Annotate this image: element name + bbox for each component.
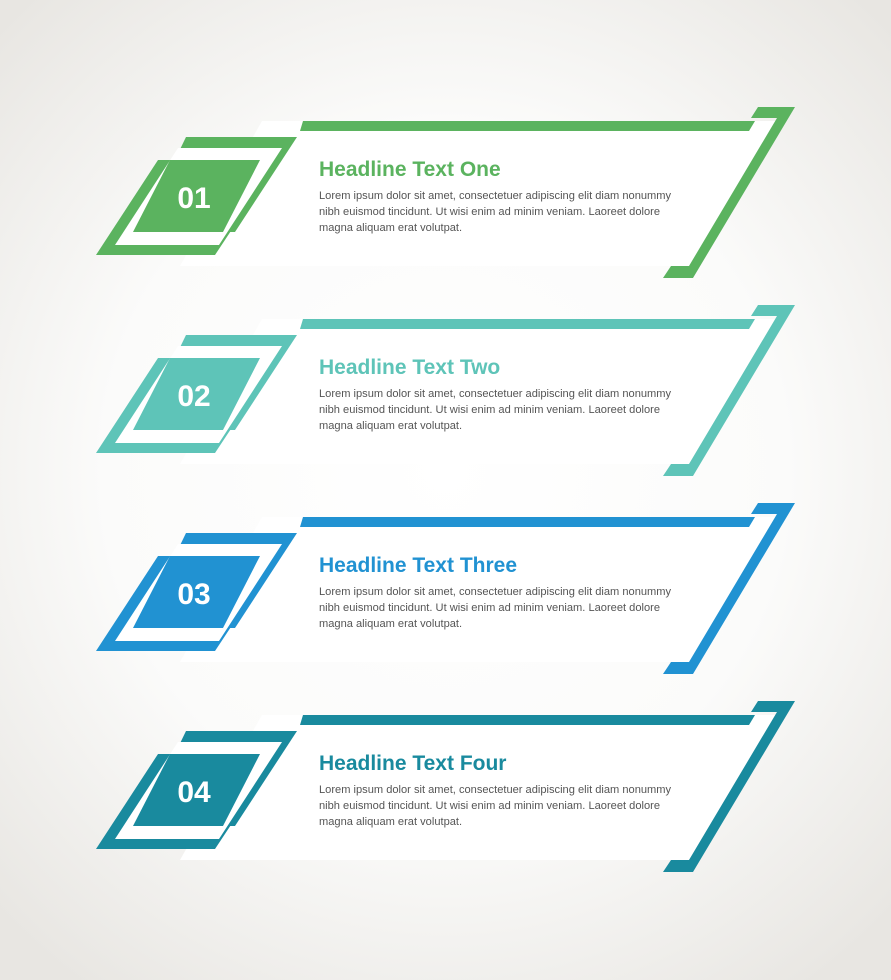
top bar xyxy=(300,715,755,725)
body text: magna aliquam erat volutpat. xyxy=(319,618,462,630)
right bracket xyxy=(663,305,795,476)
card background xyxy=(180,319,777,464)
panel: step 01 xyxy=(96,107,795,278)
top bar xyxy=(300,517,755,527)
body text: nibh euismod tincidunt. Ut wisi enim ad minim veniam. Laoreet dolore xyxy=(319,800,660,812)
body text: magna aliquam erat volutpat. xyxy=(319,816,462,828)
panel: step 02 xyxy=(96,305,795,476)
panel: step 03 xyxy=(96,503,795,674)
body text: Lorem ipsum dolor sit amet, consectetuer adipiscing elit diam nonummy xyxy=(319,784,672,796)
right bracket xyxy=(663,503,795,674)
right bracket xyxy=(663,701,795,872)
top bar xyxy=(300,319,755,329)
heading: Headline Text Four xyxy=(319,752,506,775)
body text: nibh euismod tincidunt. Ut wisi enim ad minim veniam. Laoreet dolore xyxy=(319,602,660,614)
body text: nibh euismod tincidunt. Ut wisi enim ad minim veniam. Laoreet dolore xyxy=(319,404,660,416)
body text: Lorem ipsum dolor sit amet, consectetuer adipiscing elit diam nonummy xyxy=(319,190,672,202)
body text: Lorem ipsum dolor sit amet, consectetuer adipiscing elit diam nonummy xyxy=(319,388,672,400)
panel: step 04 xyxy=(96,701,795,872)
heading: Headline Text One xyxy=(319,158,501,181)
number badge xyxy=(96,731,297,849)
card background xyxy=(180,121,777,266)
body text: nibh euismod tincidunt. Ut wisi enim ad minim veniam. Laoreet dolore xyxy=(319,206,660,218)
number badge xyxy=(96,137,297,255)
number badge: 03 xyxy=(177,578,211,611)
number badge xyxy=(96,335,297,453)
number badge: 01 xyxy=(177,182,211,215)
body text: Lorem ipsum dolor sit amet, consectetuer adipiscing elit diam nonummy xyxy=(319,586,672,598)
body text: magna aliquam erat volutpat. xyxy=(319,222,462,234)
top bar xyxy=(300,121,755,131)
right bracket xyxy=(663,107,795,278)
number badge xyxy=(96,533,297,651)
number badge: 04 xyxy=(177,776,211,809)
card background xyxy=(180,517,777,662)
heading: Headline Text Three xyxy=(319,554,517,577)
body text: magna aliquam erat volutpat. xyxy=(319,420,462,432)
number badge: 02 xyxy=(177,380,211,413)
card background xyxy=(180,715,777,860)
heading: Headline Text Two xyxy=(319,356,500,379)
